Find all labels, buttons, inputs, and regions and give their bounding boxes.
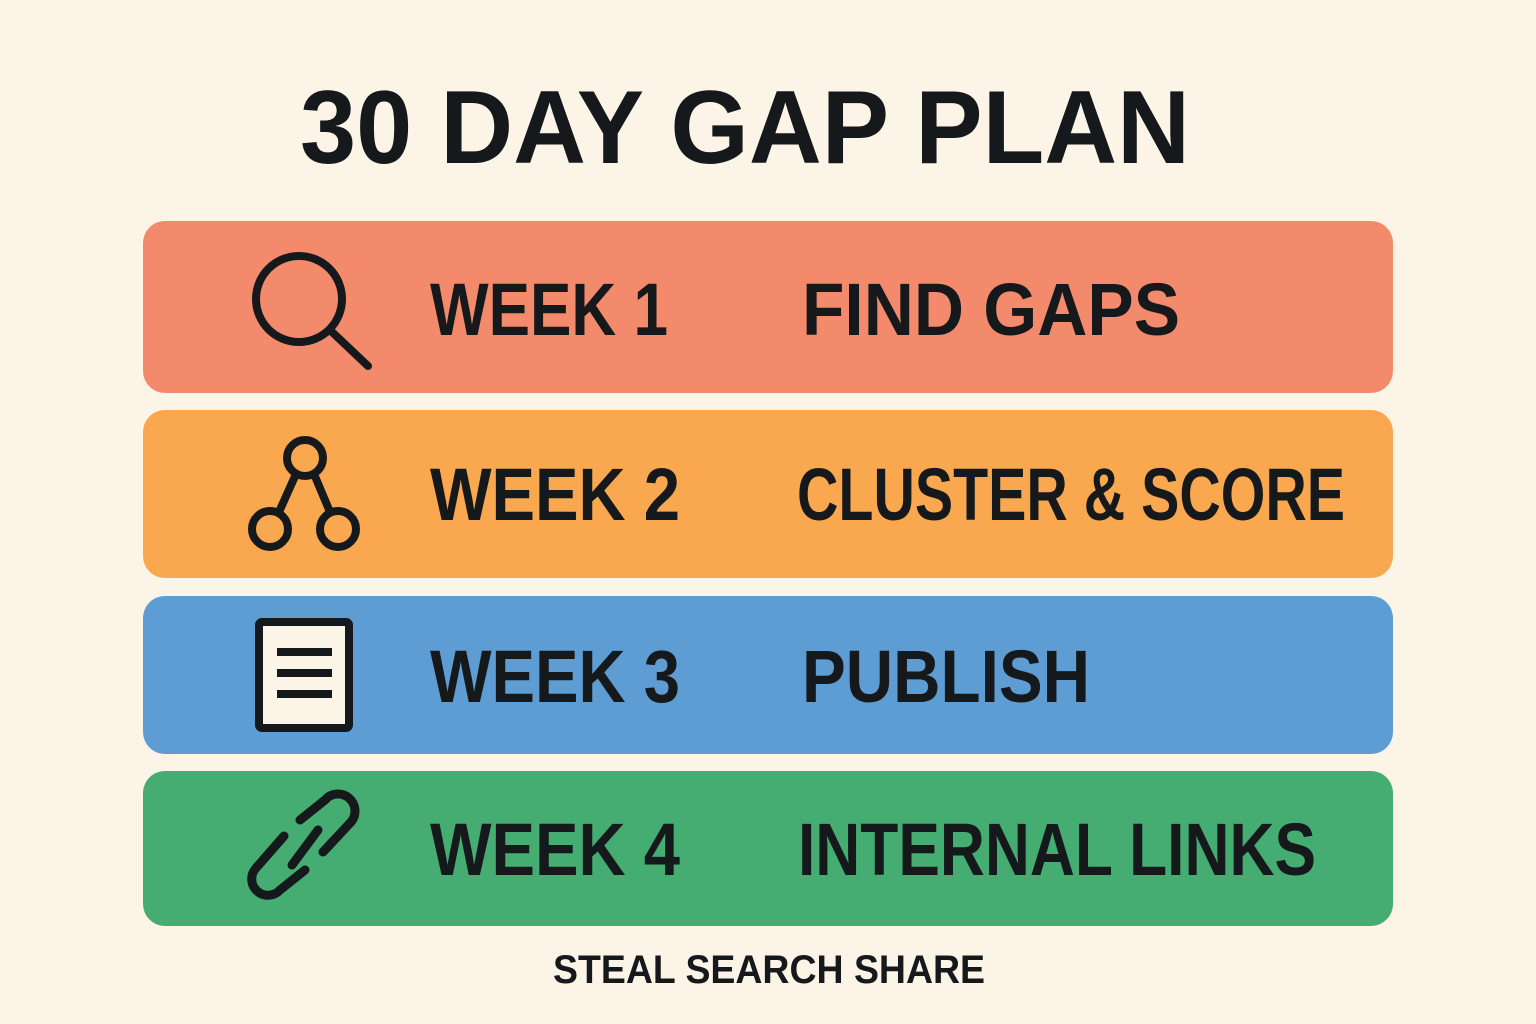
panel: week 1: WEEK 1 bbox=[430, 268, 668, 351]
panel: week 4: WEEK 4 bbox=[430, 808, 680, 891]
icon: cluster bbox=[252, 440, 356, 547]
panel: week 4 bbox=[143, 771, 1393, 926]
panel: week 2 bbox=[143, 410, 1393, 578]
panel: week 3: WEEK 3 bbox=[430, 635, 680, 718]
panel: week 2: WEEK 2 bbox=[430, 453, 680, 536]
icon: document bbox=[259, 622, 349, 728]
title: 30 DAY GAP PLAN bbox=[300, 70, 1190, 186]
panel: week 3 bbox=[143, 596, 1393, 754]
panel: week 4: INTERNAL LINKS bbox=[798, 808, 1316, 891]
panel: week 1 bbox=[143, 221, 1393, 393]
panel: week 3: PUBLISH bbox=[802, 635, 1090, 718]
footer: STEAL SEARCH SHARE bbox=[553, 948, 985, 992]
icon: link bbox=[252, 794, 355, 895]
panel: week 2: CLUSTER & SCORE bbox=[797, 453, 1345, 536]
panel: week 1: FIND GAPS bbox=[802, 268, 1180, 351]
icon: magnifier bbox=[256, 256, 368, 366]
